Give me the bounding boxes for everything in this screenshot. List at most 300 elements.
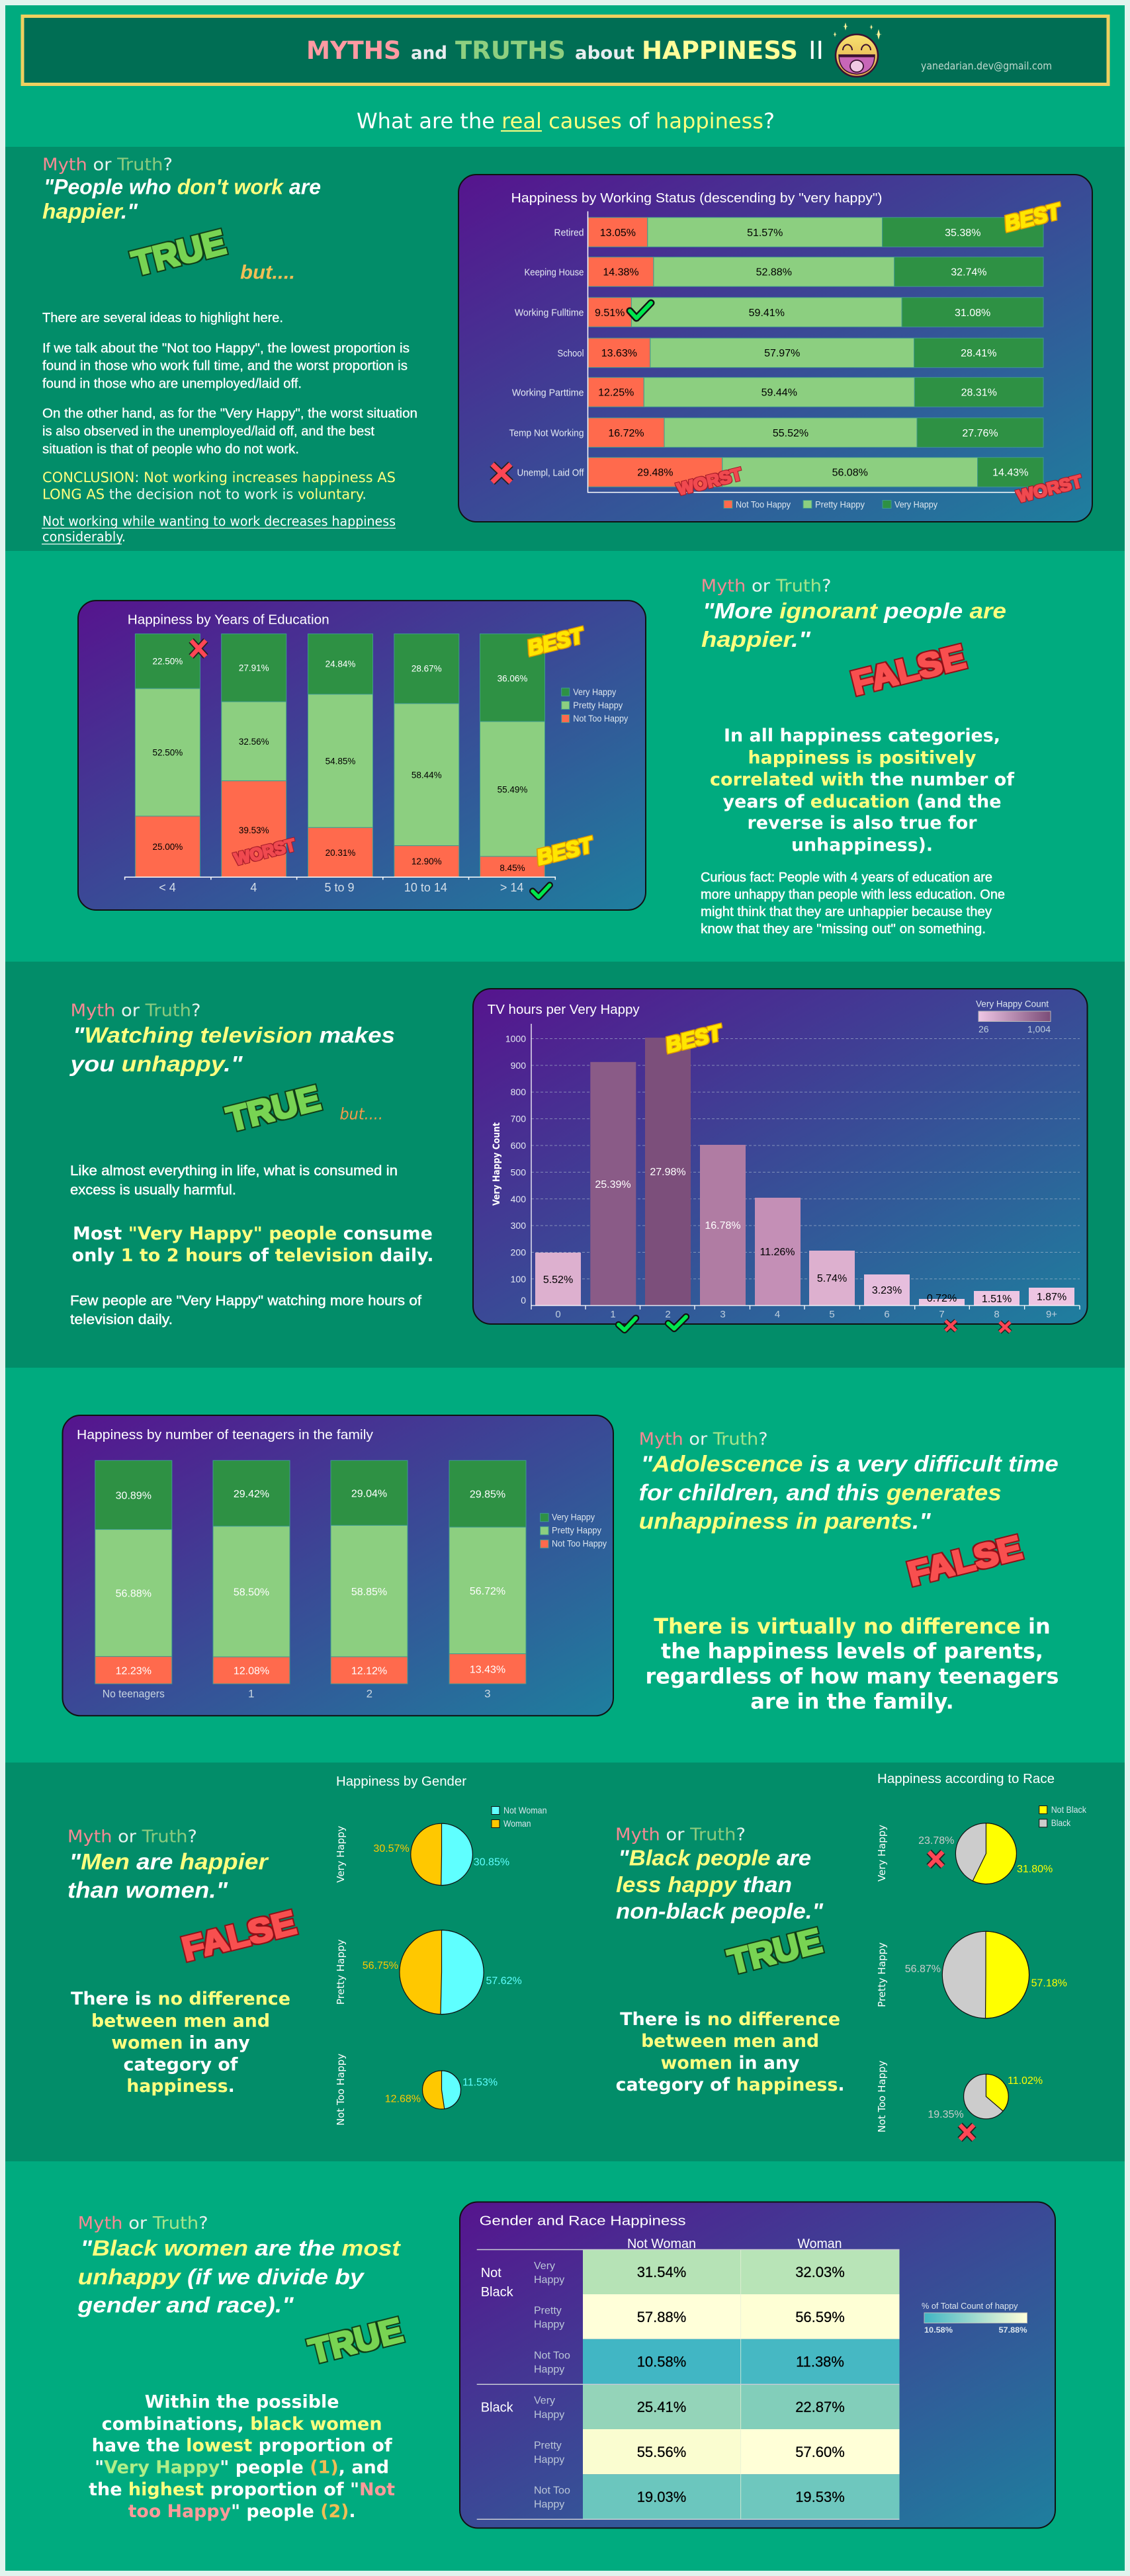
curious fact: know that they are "missing out" on something. bbox=[701, 922, 986, 936]
key finding: gender: between men and bbox=[91, 2011, 270, 2032]
value labels: 12.12% bbox=[351, 1666, 387, 1677]
colour legend bbox=[976, 999, 1051, 1034]
section 1: working status bbox=[5, 147, 1125, 551]
value labels: 24.84% bbox=[326, 659, 355, 669]
chart title: Happiness by Years of Education bbox=[128, 612, 329, 627]
axis labels: < 4 bbox=[159, 881, 176, 894]
pie labels: 11.02% bbox=[1008, 2075, 1043, 2087]
verdict stamp: false: FALSE bbox=[179, 1904, 300, 1968]
cell values: 55.56% bbox=[637, 2444, 686, 2460]
category labels bbox=[509, 228, 584, 479]
value labels: 16.78% bbox=[705, 1220, 741, 1231]
value labels: 59.41% bbox=[749, 308, 785, 319]
row labels bbox=[335, 1826, 347, 2126]
value labels: 28.41% bbox=[961, 348, 996, 359]
y axis labels: 0 bbox=[521, 1295, 526, 1306]
claim quote bbox=[639, 1452, 1059, 1534]
key finding: gender: There is no difference bbox=[71, 1989, 290, 2009]
x axis labels: 6 bbox=[884, 1309, 890, 1320]
key finding bbox=[71, 1224, 434, 1266]
cell values: 57.60% bbox=[795, 2444, 845, 2460]
value labels: 9.51% bbox=[595, 308, 625, 319]
value labels: 22.50% bbox=[153, 657, 183, 667]
colour legend: 26 bbox=[978, 1024, 989, 1034]
row group labels bbox=[481, 2266, 514, 2415]
explanation text: On the other hand, as for the "Very Happy", the worst situation bbox=[42, 406, 417, 421]
colour legend: % of Total Count of happy bbox=[922, 2301, 1018, 2311]
pie labels: 56.87% bbox=[905, 1964, 941, 1975]
value labels: 29.42% bbox=[234, 1489, 269, 1500]
icon: laughing emoji with sparkles bbox=[833, 22, 882, 77]
legend: Not Woman bbox=[503, 1805, 546, 1815]
column headers: Woman bbox=[798, 2237, 842, 2251]
legend: Pretty Happy bbox=[573, 700, 623, 710]
y axis labels: 800 bbox=[511, 1087, 526, 1097]
value labels bbox=[543, 1167, 1066, 1305]
legend: Very Happy bbox=[552, 1512, 595, 1522]
key finding: unhappiness). bbox=[791, 835, 933, 856]
pie: not too happy bbox=[422, 2071, 460, 2109]
chart: happiness according to race pies bbox=[876, 1772, 1087, 2140]
explanation text: If we talk about the "Not too Happy", the lowest proportion is bbox=[42, 341, 410, 356]
y axis labels: 100 bbox=[511, 1274, 526, 1284]
bars bbox=[535, 1038, 1074, 1306]
key finding: regardless of how many teenagers bbox=[646, 1664, 1059, 1689]
legend: Very Happy bbox=[894, 499, 937, 509]
title: about bbox=[575, 43, 634, 63]
y axis labels: 900 bbox=[511, 1060, 526, 1071]
colour legend: 57.88% bbox=[999, 2325, 1027, 2335]
claim quote: unhappiness in parents ." bbox=[639, 1509, 932, 1534]
cell values bbox=[637, 2264, 845, 2505]
value labels: 36.06% bbox=[498, 674, 527, 684]
legend: Not Too Happy bbox=[552, 1538, 607, 1549]
key finding: combinations, black women bbox=[102, 2414, 382, 2434]
cell values: 32.03% bbox=[795, 2264, 845, 2280]
claim quote: "Adolescence is a very difficult time bbox=[641, 1452, 1059, 1477]
claim quote: race bbox=[616, 1845, 823, 1923]
explanation text: excess is usually harmful. bbox=[70, 1183, 236, 1198]
value labels: 16.72% bbox=[608, 428, 644, 439]
key finding: There is virtually no difference in bbox=[654, 1614, 1051, 1639]
x axis labels: 5 bbox=[829, 1309, 835, 1320]
value labels: 55.52% bbox=[773, 428, 808, 439]
section 2: education bbox=[5, 551, 1125, 962]
x axis labels: 9+ bbox=[1046, 1309, 1057, 1320]
verdict stamp: false: FALSE bbox=[904, 1528, 1025, 1593]
value labels: 31.08% bbox=[955, 308, 990, 319]
value labels: 29.48% bbox=[637, 468, 674, 479]
row sub labels: Happy bbox=[534, 2499, 564, 2511]
y axis labels: 600 bbox=[511, 1140, 526, 1151]
value labels: 12.08% bbox=[234, 1666, 269, 1677]
y axis labels: 200 bbox=[511, 1247, 526, 1258]
pie labels: 56.75% bbox=[363, 1960, 398, 1972]
pie: very happy bbox=[411, 1823, 472, 1886]
panel: happiness by years of education bbox=[78, 601, 646, 910]
claim quote: happier." bbox=[42, 200, 138, 224]
y axis labels bbox=[505, 1033, 526, 1306]
x axis labels bbox=[555, 1309, 1057, 1320]
value labels: 1.51% bbox=[982, 1294, 1012, 1305]
legend bbox=[724, 499, 937, 509]
curious fact: more unhappy than people with less education. One bbox=[701, 888, 1005, 902]
value labels: 51.57% bbox=[747, 228, 783, 239]
key finding: gender: women in any bbox=[111, 2033, 250, 2053]
pie labels: 31.80% bbox=[1017, 1864, 1053, 1875]
claim quote: race: non-black people." bbox=[616, 1899, 823, 1923]
pie labels: 23.78% bbox=[918, 1835, 954, 1847]
row labels: Pretty Happy bbox=[876, 1942, 888, 2007]
value labels: 12.25% bbox=[598, 388, 634, 399]
section 3: television bbox=[5, 962, 1125, 1368]
pie: pretty happy bbox=[942, 1931, 1029, 2018]
cell values: 25.41% bbox=[637, 2399, 686, 2415]
subtitle: What are the real causes of happiness? bbox=[357, 108, 775, 134]
pie labels: 30.85% bbox=[474, 1857, 509, 1868]
cell values: 31.54% bbox=[637, 2264, 686, 2280]
value labels: 28.31% bbox=[961, 388, 997, 399]
value labels: 58.50% bbox=[234, 1587, 269, 1598]
value labels: 12.90% bbox=[412, 856, 442, 866]
key finding: race bbox=[616, 2009, 845, 2095]
explanation text: There are several ideas to highlight here. bbox=[42, 311, 283, 325]
value labels: 13.43% bbox=[470, 1664, 505, 1675]
row sub labels: Happy bbox=[534, 2409, 564, 2421]
value labels: 1.87% bbox=[1037, 1292, 1066, 1303]
explanation text bbox=[70, 1163, 398, 1198]
value labels: 32.56% bbox=[239, 737, 269, 747]
legend bbox=[492, 1805, 546, 1829]
cell values: 22.87% bbox=[795, 2399, 845, 2415]
icon: check bbox=[630, 303, 651, 318]
legend: Very Happy bbox=[573, 686, 616, 697]
key finding: race: There is no difference bbox=[620, 2009, 840, 2030]
row labels: Pretty Happy bbox=[335, 1939, 347, 2005]
value labels: 57.97% bbox=[764, 348, 800, 359]
closing text: Few people are "Very Happy" watching more hours of bbox=[70, 1294, 421, 1308]
legend bbox=[562, 686, 628, 724]
value labels: 27.98% bbox=[650, 1167, 686, 1178]
value labels: 32.74% bbox=[951, 267, 987, 278]
icon: cross eight hours bbox=[1000, 1322, 1010, 1332]
pie labels: 19.35% bbox=[928, 2109, 964, 2120]
claim quote bbox=[42, 175, 321, 224]
title box bbox=[22, 16, 1108, 85]
key finding: have the lowest proportion of bbox=[92, 2435, 392, 2456]
sticker: worst very happy: WORST bbox=[1015, 471, 1084, 507]
chart title: TV hours per Very Happy bbox=[488, 1003, 640, 1017]
sticker: best: BEST bbox=[664, 1020, 725, 1058]
claim quote: race: less happy than bbox=[616, 1872, 792, 1897]
chart title: Happiness according to Race bbox=[877, 1772, 1055, 1786]
row labels: Very Happy bbox=[335, 1826, 347, 1883]
value labels: 52.50% bbox=[153, 747, 183, 757]
key finding: only 1 to 2 hours of television daily. bbox=[71, 1245, 434, 1266]
panel: gender and race happiness heatmap bbox=[460, 2202, 1055, 2528]
value labels: 11.26% bbox=[760, 1247, 795, 1258]
value labels: 56.08% bbox=[832, 468, 868, 479]
sticker: worst unhappy: WORST bbox=[675, 464, 744, 499]
category labels: School bbox=[557, 348, 584, 359]
colour legend bbox=[922, 2301, 1027, 2335]
row group labels: Not bbox=[481, 2266, 501, 2280]
category labels: Retired bbox=[554, 228, 584, 238]
row sub labels bbox=[534, 2261, 570, 2511]
value labels: 58.85% bbox=[351, 1587, 387, 1598]
value labels: 25.00% bbox=[153, 842, 183, 852]
but annotation: but.... bbox=[340, 1104, 383, 1123]
closing text: television daily. bbox=[70, 1312, 173, 1327]
title: MYTHS bbox=[306, 36, 401, 65]
chart title: Happiness by Gender bbox=[336, 1774, 466, 1789]
value labels bbox=[595, 228, 1028, 479]
x axis labels: 4 bbox=[775, 1309, 780, 1320]
value labels: 29.04% bbox=[351, 1488, 387, 1499]
title: II bbox=[808, 36, 824, 65]
row sub labels: Pretty bbox=[534, 2440, 562, 2451]
value labels: 39.53% bbox=[239, 825, 269, 835]
row labels: Not Too Happy bbox=[876, 2060, 888, 2132]
value labels: 3.23% bbox=[872, 1285, 902, 1296]
x axis labels: 7 bbox=[939, 1309, 945, 1320]
value labels: 56.88% bbox=[116, 1589, 152, 1600]
key finding: In all happiness categories, bbox=[724, 726, 1000, 746]
icon: cross very happy bbox=[929, 1852, 943, 1866]
sticker: worst: WORST bbox=[232, 835, 298, 869]
colour legend: 1,004 bbox=[1027, 1024, 1051, 1034]
x axis labels: 8 bbox=[994, 1309, 1000, 1320]
cell values: 11.38% bbox=[796, 2353, 844, 2370]
claim quote bbox=[77, 2235, 402, 2317]
chart title: Gender and Race Happiness bbox=[480, 2214, 686, 2229]
category labels: Temp Not Working bbox=[509, 427, 584, 439]
value labels: 55.49% bbox=[498, 785, 527, 795]
key finding: race: women in any bbox=[661, 2053, 800, 2073]
value labels: 28.67% bbox=[412, 664, 442, 674]
category labels: Working Fulltime bbox=[515, 307, 584, 319]
legend: Not Too Happy bbox=[736, 499, 791, 509]
pie labels: 57.18% bbox=[1031, 1977, 1067, 1989]
claim quote bbox=[701, 599, 1006, 651]
pie labels: 11.53% bbox=[462, 2077, 498, 2089]
title: TRUTHS bbox=[455, 36, 566, 65]
key finding: gender: happiness. bbox=[126, 2076, 235, 2097]
myth or truth prompt: Myth or Truth? bbox=[639, 1429, 768, 1449]
axis labels: > 14 bbox=[500, 881, 523, 894]
icon: check one hour bbox=[619, 1318, 636, 1330]
claim quote: "People who don't work are bbox=[44, 175, 321, 198]
claim quote: "Black women are the most bbox=[81, 2235, 402, 2261]
curious fact: might think that they are unhappier because they bbox=[701, 905, 992, 919]
value labels: 14.38% bbox=[603, 267, 639, 278]
sticker: best very happy: BEST bbox=[525, 623, 587, 660]
legend bbox=[1039, 1804, 1087, 1828]
cell values: 56.59% bbox=[795, 2309, 845, 2325]
pie labels: 12.68% bbox=[385, 2094, 421, 2104]
stacked bars bbox=[135, 634, 544, 877]
legend: Woman bbox=[503, 1818, 531, 1829]
axis labels: 4 bbox=[250, 881, 257, 894]
section 4: teenagers bbox=[5, 1368, 1125, 1763]
key finding bbox=[89, 2391, 395, 2522]
claim quote: for children, and this generates bbox=[639, 1480, 1002, 1505]
row group labels: Black bbox=[481, 2401, 514, 2415]
category labels: Keeping House bbox=[524, 267, 584, 278]
cell values: 57.88% bbox=[637, 2309, 686, 2325]
legend: Not Too Happy bbox=[573, 713, 628, 724]
myth or truth prompt: Myth or Truth? bbox=[701, 577, 831, 597]
claim quote: race: "Black people are bbox=[618, 1845, 811, 1870]
key finding: are in the family. bbox=[750, 1688, 954, 1714]
axis labels bbox=[159, 881, 523, 894]
key finding: race: between men and bbox=[641, 2031, 819, 2052]
value labels: 5.52% bbox=[543, 1274, 573, 1286]
row sub labels: Happy bbox=[534, 2364, 564, 2376]
colour legend: Very Happy Count bbox=[976, 999, 1049, 1009]
heatmap cells bbox=[583, 2250, 900, 2519]
y axis labels: 700 bbox=[511, 1114, 526, 1124]
cell values: 19.53% bbox=[795, 2489, 845, 2505]
stacked bars bbox=[588, 218, 1043, 487]
value labels: 25.39% bbox=[595, 1179, 631, 1190]
row sub labels: Very bbox=[534, 2395, 555, 2406]
chart: happiness by gender pies bbox=[335, 1774, 546, 2126]
claim quote bbox=[69, 1022, 395, 1076]
conclusion: CONCLUSION: Not working increases happiness AS bbox=[42, 470, 396, 485]
claim quote: men bbox=[67, 1849, 269, 1903]
verdict stamp: true: TRUE bbox=[724, 1922, 826, 1981]
chart title: Happiness by Working Status (descending by "very happy") bbox=[511, 191, 883, 206]
value labels: 0.72% bbox=[927, 1293, 957, 1304]
title: and bbox=[411, 43, 447, 63]
title bbox=[306, 36, 824, 65]
x axis labels: 1 bbox=[610, 1309, 616, 1320]
row sub labels: Happy bbox=[534, 2454, 564, 2466]
conclusion: LONG AS the decision not to work is voluntary. bbox=[42, 487, 367, 503]
row sub labels: Not Too bbox=[534, 2350, 570, 2361]
icon: cross bbox=[492, 464, 511, 482]
y axis labels: 500 bbox=[511, 1167, 526, 1177]
pie: pretty happy bbox=[400, 1930, 484, 2015]
panel: happiness by working status bbox=[458, 175, 1092, 522]
x axis labels: 3 bbox=[720, 1309, 726, 1320]
cell values: 10.58% bbox=[637, 2353, 686, 2370]
sticker: best: BEST bbox=[1002, 199, 1064, 236]
value labels bbox=[153, 657, 527, 873]
key finding: correlated with the number of bbox=[710, 770, 1014, 790]
key finding: the happiness levels of parents, bbox=[661, 1639, 1043, 1664]
x axis labels: 0 bbox=[555, 1309, 561, 1320]
row sub labels: Pretty bbox=[534, 2306, 562, 2316]
key finding bbox=[646, 1614, 1059, 1714]
explanation text bbox=[42, 311, 417, 456]
pie labels: 57.62% bbox=[486, 1975, 522, 1987]
claim quote: "More ignorant people are bbox=[703, 599, 1006, 623]
pie labels bbox=[363, 1843, 522, 2104]
y axis title: Very Happy Count bbox=[492, 1122, 502, 1206]
key finding: "Very Happy" people (1), and bbox=[95, 2458, 389, 2477]
explanation text: found in those who are unemployed/laid off. bbox=[42, 377, 302, 392]
value labels: 58.44% bbox=[412, 770, 442, 780]
verdict stamp: false: FALSE bbox=[848, 638, 969, 702]
column headers: Not Woman bbox=[627, 2237, 696, 2251]
curious fact bbox=[701, 870, 1005, 936]
value labels: 13.63% bbox=[601, 348, 637, 359]
myth or truth prompt: Myth or Truth? bbox=[42, 155, 173, 175]
row sub labels: Very bbox=[534, 2261, 555, 2272]
row sub labels: Happy bbox=[534, 2319, 564, 2331]
pie labels bbox=[905, 1835, 1067, 2120]
category labels: Unempl, Laid Off bbox=[517, 467, 584, 479]
value labels: 27.91% bbox=[239, 663, 269, 673]
value labels bbox=[116, 1488, 505, 1677]
value labels: 29.85% bbox=[470, 1489, 505, 1501]
claim quote: gender and race)." bbox=[77, 2292, 294, 2317]
verdict stamp: true: TRUE bbox=[223, 1079, 324, 1139]
legend: Not Black bbox=[1051, 1804, 1087, 1815]
chart title: Happiness by number of teenagers in the family bbox=[77, 1428, 373, 1442]
stacked bars bbox=[95, 1460, 526, 1684]
myth or truth prompt: Myth or Truth? bbox=[67, 1827, 197, 1847]
claim quote: unhappy (if we divide by bbox=[78, 2264, 365, 2289]
curious fact: Curious fact: People with 4 years of education are bbox=[701, 870, 992, 885]
pie: very happy bbox=[955, 1823, 1016, 1884]
axis labels: 2 bbox=[367, 1688, 372, 1700]
explanation text: Like almost everything in life, what is consumed in bbox=[70, 1163, 398, 1179]
icon: check bbox=[533, 885, 550, 897]
icon: cross not too happy bbox=[960, 2125, 974, 2140]
key finding: gender: category of bbox=[123, 2054, 238, 2075]
legend: Black bbox=[1051, 1817, 1071, 1828]
panel: tv hours per very happy bbox=[473, 989, 1088, 1332]
panel: happiness by number of teenagers bbox=[62, 1415, 613, 1716]
explanation text: situation is that of people who do not work. bbox=[42, 442, 299, 456]
row sub labels: Happy bbox=[534, 2274, 564, 2286]
row labels bbox=[876, 1825, 888, 2132]
colour legend: 10.58% bbox=[924, 2325, 953, 2335]
but annotation: but.... bbox=[240, 262, 295, 283]
conclusion: Not working while wanting to work decreases happiness bbox=[42, 513, 396, 529]
category labels: Working Parttime bbox=[512, 388, 584, 398]
icon: cross seven hours bbox=[945, 1321, 956, 1331]
axis labels: 3 bbox=[484, 1688, 491, 1700]
key finding: too Happy" people (2). bbox=[128, 2501, 356, 2522]
legend bbox=[541, 1512, 607, 1549]
pie: not too happy bbox=[964, 2074, 1008, 2119]
value labels: 52.88% bbox=[756, 267, 792, 278]
sticker: best not too happy: BEST bbox=[535, 833, 596, 870]
row labels: Very Happy bbox=[876, 1825, 888, 1882]
y axis labels: 400 bbox=[511, 1194, 526, 1204]
conclusion: considerably. bbox=[42, 529, 126, 545]
key finding: gender bbox=[71, 1989, 290, 2097]
value labels: 20.31% bbox=[326, 848, 355, 858]
x axis labels: 2 bbox=[665, 1309, 671, 1320]
y axis labels: 300 bbox=[511, 1220, 526, 1231]
myth or truth prompt: Myth or Truth? bbox=[70, 1001, 201, 1021]
myth or truth prompt: Myth or Truth? bbox=[78, 2214, 208, 2233]
explanation text: found in those who work full time, and the worst proportion is bbox=[42, 358, 408, 373]
key finding: Most "Very Happy" people consume bbox=[73, 1224, 433, 1244]
row labels: Not Too Happy bbox=[335, 2054, 347, 2126]
myth or truth prompt: Myth or Truth? bbox=[615, 1825, 746, 1845]
claim quote: men: than women." bbox=[67, 1878, 228, 1903]
row group labels: Black bbox=[481, 2285, 514, 2300]
row sub labels: Not Too bbox=[534, 2485, 570, 2496]
conclusion bbox=[42, 470, 396, 545]
value labels: 5.74% bbox=[817, 1273, 847, 1284]
